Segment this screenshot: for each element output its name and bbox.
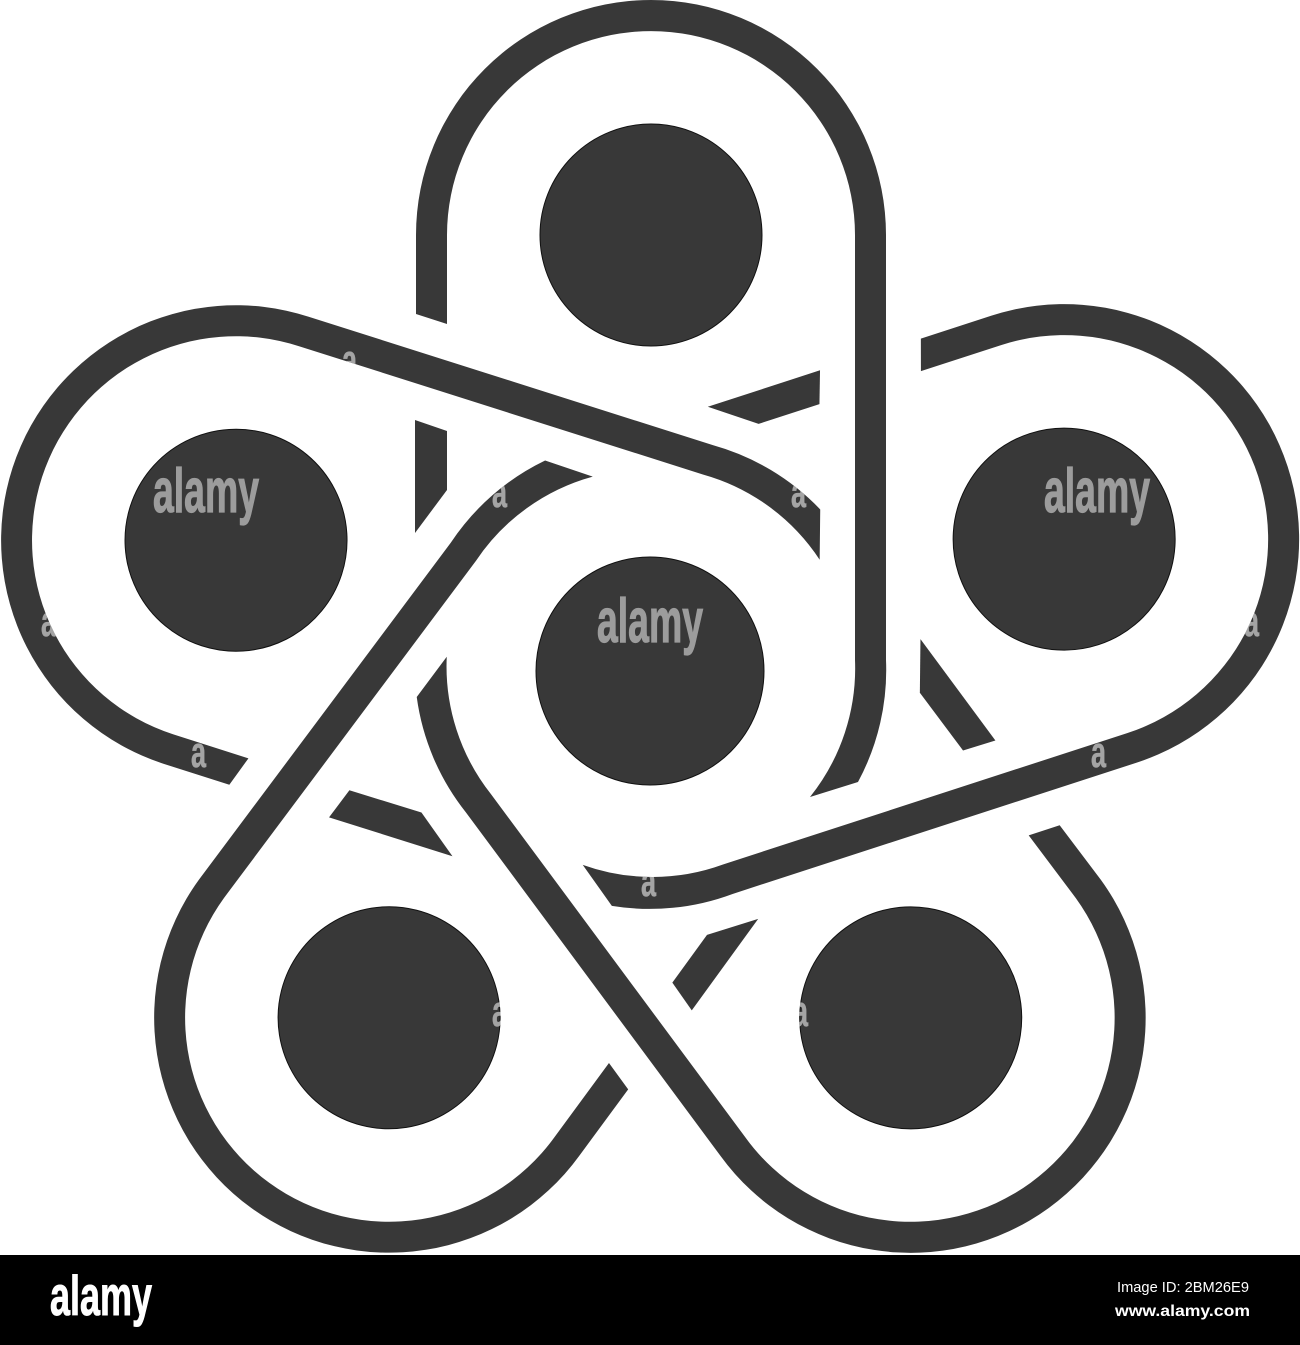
watermark fragments on the bands: a	[492, 987, 507, 1036]
website: www.alamy.com	[1114, 1303, 1250, 1320]
watermark fragments on the bands: a	[1091, 728, 1106, 777]
capsule: bottom right	[385, 423, 1239, 1345]
footer band	[0, 1255, 1300, 1345]
centre circle	[536, 557, 764, 785]
watermark: centre circle: alamy	[597, 587, 703, 656]
capsule: top	[415, 0, 886, 797]
watermarks on circles	[153, 457, 1150, 656]
watermark: right circle: alamy	[1044, 457, 1150, 526]
watermark fragments on the bands: a	[791, 468, 806, 517]
watermark fragments on the bands	[41, 336, 1259, 1036]
capsule: right	[460, 242, 1300, 935]
watermark fragments on the bands: a	[41, 597, 56, 646]
watermark fragments on the bands: a	[793, 987, 808, 1036]
watermark fragments on the bands: a	[492, 468, 507, 517]
capsule: bottom left	[61, 429, 911, 1345]
footer logo text: alamy	[50, 1264, 152, 1327]
watermark fragments on the bands: a	[1244, 597, 1259, 646]
image id: Image ID: 2BM26E9	[1117, 1279, 1249, 1296]
watermark fragments on the bands: a	[342, 336, 357, 385]
watermark fragments on the bands: a	[641, 857, 656, 906]
capsule: left	[0, 241, 843, 937]
watermark: left circle: alamy	[153, 457, 259, 526]
watermark fragments on the bands: a	[191, 728, 206, 777]
